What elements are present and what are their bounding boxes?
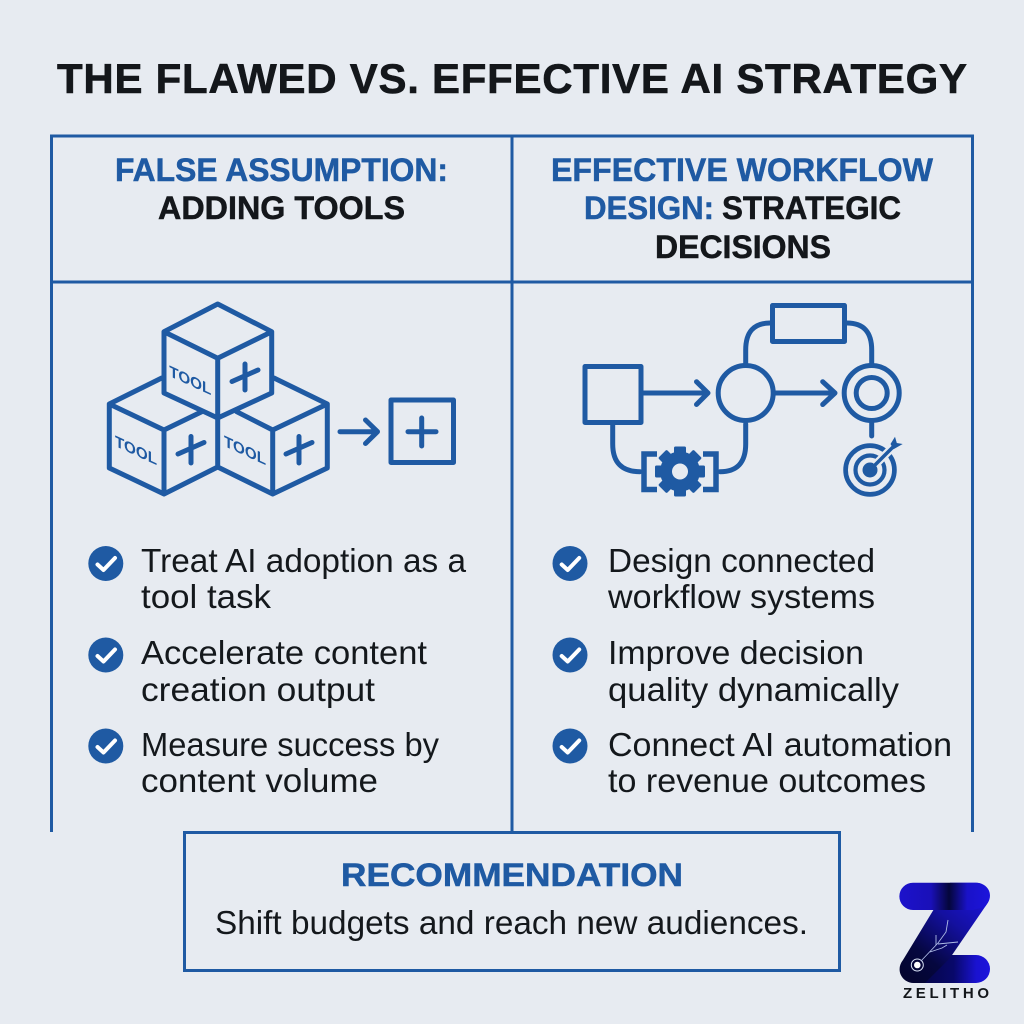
logo: Zelitho [899, 883, 990, 1002]
bullet icon [88, 728, 123, 764]
bullet text [607, 542, 875, 615]
bullet text: quality dynamically [608, 671, 900, 708]
bullet text: creation output [141, 671, 375, 708]
title: THE FLAWED VS. EFFECTIVE AI STRATEGY [57, 55, 967, 102]
icon: connected workflow diagram with target [585, 306, 903, 496]
bullet text [141, 726, 439, 799]
icon: stacked tool cubes plus add box: TOOL [115, 433, 157, 469]
icon: stacked tool cubes plus add box: TOOL [224, 433, 266, 469]
bullet text: Accelerate content [141, 634, 427, 671]
left column heading [115, 152, 448, 226]
icon: stacked tool cubes plus add box [109, 304, 454, 494]
bullet text: tool task [141, 578, 272, 615]
left column heading: ADDING TOOLS [158, 190, 405, 226]
bullet text: Improve decision [608, 634, 864, 671]
bullet text [141, 542, 467, 615]
bullet icon [88, 546, 123, 581]
logo: Zelitho: ZELITHO [903, 985, 989, 1002]
right column heading: STRATEGIC [722, 190, 901, 226]
bullet text: Treat AI adoption as a [141, 542, 467, 579]
bullet text [608, 634, 900, 708]
right column bullet list [552, 542, 952, 799]
icon: gear [655, 446, 705, 496]
right column heading: DECISIONS [655, 229, 831, 265]
bullet text [141, 634, 427, 708]
bullet text: workflow systems [607, 578, 875, 615]
recommendation text: Shift budgets and reach new audiences. [215, 904, 808, 941]
recommendation heading: RECOMMENDATION [341, 857, 683, 893]
bullet text: Measure success by [141, 726, 439, 763]
icon: target with dart [846, 437, 903, 494]
bullet icon [552, 546, 588, 581]
bullet text: to revenue outcomes [608, 762, 926, 799]
icon: stacked tool cubes plus add box: TOOL [169, 363, 211, 399]
right column heading [551, 152, 934, 265]
bullet icon [88, 638, 123, 672]
bullet text: Connect AI automation [608, 726, 952, 763]
recommendation box [184, 832, 840, 970]
bullet icon [552, 638, 588, 672]
bullet icon [552, 728, 588, 764]
left column heading: FALSE ASSUMPTION: [115, 152, 448, 188]
bullet text: content volume [141, 762, 378, 799]
right column heading: EFFECTIVE WORKFLOW [551, 152, 934, 188]
comparison table frame [52, 136, 972, 832]
right column heading: DESIGN: [584, 190, 714, 226]
bullet text: Design connected [608, 542, 875, 579]
bullet text [608, 726, 952, 799]
left column bullet list [88, 542, 467, 799]
